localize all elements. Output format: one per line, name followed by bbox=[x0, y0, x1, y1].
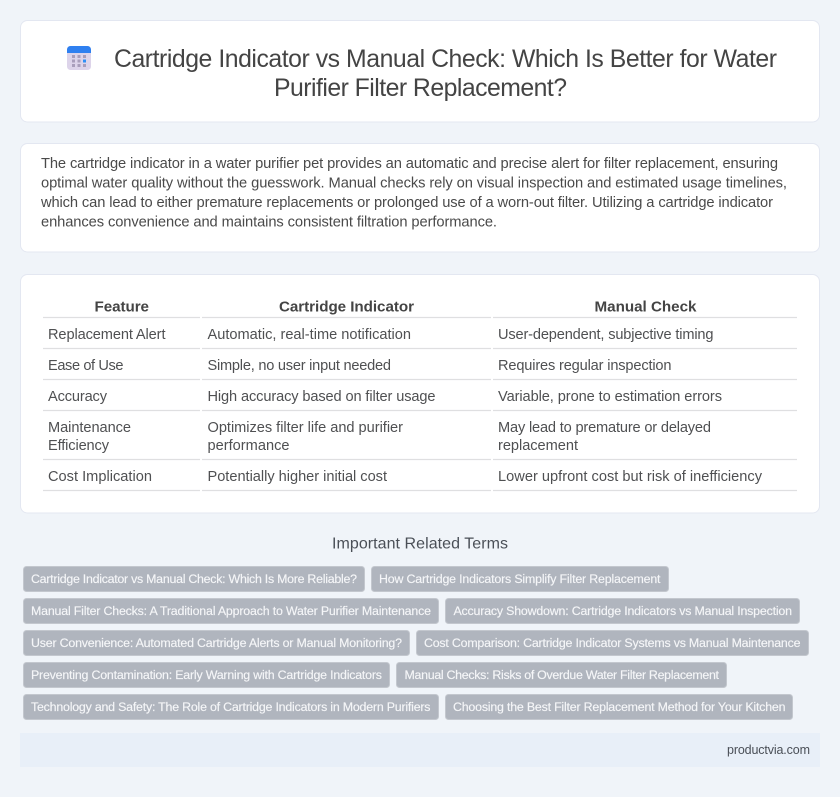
table header: Feature bbox=[94, 298, 149, 316]
icon: calendar bbox=[67, 46, 91, 70]
table row: ease of use: Ease of Use bbox=[48, 358, 124, 374]
table row: replacement alert: Replacement Alert bbox=[48, 327, 166, 343]
tag bbox=[446, 598, 800, 624]
table row: accuracy: Variable, prone to estimation errors bbox=[498, 389, 722, 405]
panel: introduction bbox=[20, 144, 820, 252]
table row: cost implication: Potentially higher initial cost bbox=[208, 469, 387, 485]
tag bbox=[372, 566, 668, 592]
text block: introduction paragraph: The cartridge indicator in a water purifier pet provides an automatic and precise alert for filter replacement, ensuring bbox=[41, 156, 778, 172]
tag bbox=[416, 630, 808, 656]
tag: Preventing Contamination: Early Warning with Cartridge Indicators bbox=[31, 668, 382, 682]
table row: maintenance efficiency: Optimizes filter life and purifier bbox=[208, 420, 403, 436]
table row: cost implication bbox=[43, 469, 797, 490]
table row: replacement alert bbox=[43, 327, 797, 348]
tag: Accuracy Showdown: Cartridge Indicators vs Manual Inspection bbox=[454, 604, 792, 618]
tag: Cost Comparison: Cartridge Indicator Systems vs Manual Maintenance bbox=[424, 636, 801, 650]
table row: replacement alert: Automatic, real-time notification bbox=[208, 327, 411, 343]
table row: ease of use bbox=[43, 358, 797, 380]
tag bbox=[396, 662, 726, 688]
tag bbox=[446, 694, 792, 720]
table header bbox=[43, 298, 797, 318]
panel: comparison table bbox=[20, 274, 820, 513]
table row: cost implication: Cost Implication bbox=[48, 469, 152, 485]
tag: Manual Filter Checks: A Traditional Approach to Water Purifier Maintenance bbox=[31, 604, 431, 618]
table header: Cartridge Indicator bbox=[279, 298, 414, 316]
panel: title card bbox=[20, 20, 820, 122]
tag bbox=[24, 566, 364, 592]
tag bbox=[24, 662, 390, 688]
table row: cost implication: Lower upfront cost but risk of inefficiency bbox=[498, 469, 763, 485]
heading: title bbox=[114, 46, 777, 102]
text block: introduction paragraph: enhances convenience and maintains consistent filtration performance. bbox=[41, 214, 497, 230]
tag bbox=[24, 630, 410, 656]
text block: introduction paragraph: which can lead to either premature replacements or prolonged use of a worn-out filter. Utilizing a cartridge indicator bbox=[40, 195, 773, 211]
footer bbox=[20, 733, 820, 767]
table row: ease of use: Simple, no user input needed bbox=[208, 358, 391, 374]
table row: maintenance efficiency bbox=[43, 420, 797, 460]
tag: Choosing the Best Filter Replacement Method for Your Kitchen bbox=[453, 700, 786, 714]
tag: How Cartridge Indicators Simplify Filter Replacement bbox=[379, 572, 661, 586]
table row: accuracy bbox=[43, 389, 797, 410]
table row: maintenance efficiency: Efficiency bbox=[48, 438, 110, 454]
tag: User Convenience: Automated Cartridge Alerts or Manual Monitoring? bbox=[31, 636, 402, 650]
table header: Manual Check bbox=[594, 298, 697, 316]
tag bbox=[24, 598, 438, 624]
table row: maintenance efficiency: Maintenance bbox=[48, 420, 131, 436]
table row: replacement alert: User-dependent, subjective timing bbox=[498, 327, 714, 343]
table row: accuracy: High accuracy based on filter usage bbox=[208, 389, 436, 405]
tag: Manual Checks: Risks of Overdue Water Filter Replacement bbox=[404, 668, 720, 682]
table row: maintenance efficiency: replacement bbox=[498, 438, 578, 454]
heading: related terms: Important Related Terms bbox=[332, 536, 508, 552]
heading: title: Cartridge Indicator vs Manual Check: Which Is Better for Water bbox=[114, 46, 777, 73]
table row: maintenance efficiency: May lead to premature or delayed bbox=[498, 420, 711, 436]
tag: Technology and Safety: The Role of Cartridge Indicators in Modern Purifiers bbox=[31, 700, 430, 714]
tag bbox=[24, 694, 438, 720]
panel: related term tags bbox=[24, 566, 808, 720]
table row: maintenance efficiency: performance bbox=[208, 438, 290, 454]
table row: accuracy: Accuracy bbox=[48, 389, 108, 405]
text block: introduction paragraph bbox=[40, 156, 787, 230]
heading: title: Purifier Filter Replacement? bbox=[274, 75, 567, 102]
table row: ease of use: Requires regular inspection bbox=[498, 358, 672, 374]
footer: productvia.com bbox=[727, 743, 810, 757]
text block: introduction paragraph: optimal water quality without the guesswork. Manual checks rely on visual inspection and estimated usage timelines, bbox=[41, 176, 787, 192]
tag: Cartridge Indicator vs Manual Check: Which Is More Reliable? bbox=[31, 572, 357, 586]
